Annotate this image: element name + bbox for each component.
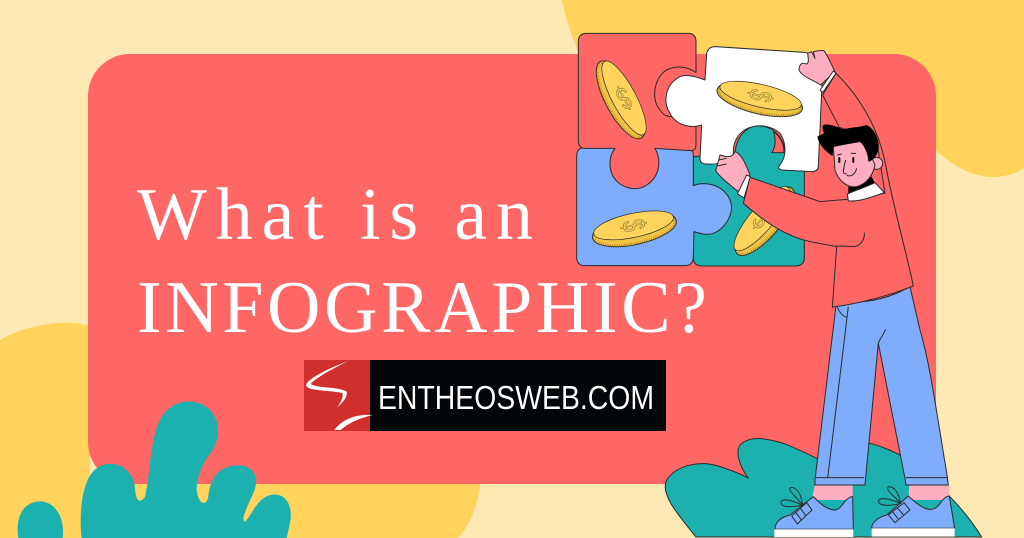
plant bottom left bbox=[18, 401, 291, 538]
coin on red piece: $ bbox=[611, 80, 637, 117]
sweater bbox=[743, 73, 913, 307]
logo bbox=[304, 360, 666, 431]
hair bbox=[817, 125, 879, 162]
logo text background bbox=[370, 360, 666, 431]
coin on red piece bbox=[587, 54, 655, 145]
title line 1: What is an bbox=[137, 174, 533, 256]
lower cuff bbox=[737, 175, 750, 198]
red puzzle piece bbox=[578, 33, 696, 189]
face bbox=[833, 142, 875, 187]
coin on teal piece bbox=[725, 178, 804, 264]
title bbox=[137, 174, 707, 349]
collar bbox=[847, 183, 884, 201]
lower hand finger lines bbox=[717, 158, 727, 166]
coin on teal piece: $ bbox=[746, 201, 778, 236]
right shoe bbox=[872, 496, 955, 528]
neck bbox=[848, 177, 875, 195]
logo mark background bbox=[304, 360, 371, 431]
logo wordmark: ENTHEOSWEB.COM bbox=[378, 379, 654, 416]
ear bbox=[871, 157, 883, 169]
facial lines bbox=[837, 153, 857, 176]
logo mark strokes bbox=[306, 361, 373, 430]
white puzzle piece bbox=[666, 47, 823, 172]
jigsaw puzzle bbox=[577, 33, 823, 266]
raised cuff bbox=[820, 71, 836, 93]
left laces bbox=[781, 487, 812, 524]
right laces bbox=[878, 487, 910, 523]
figure: legs and shoes bbox=[774, 287, 955, 537]
notch showing coral bbox=[772, 132, 784, 153]
yellow blob top right bbox=[562, 0, 1024, 177]
left sole bbox=[774, 529, 853, 537]
raised hand bbox=[799, 51, 835, 85]
bush behind figure bbox=[665, 439, 982, 537]
title line 2: INFOGRAPHIC? bbox=[137, 267, 707, 349]
teal puzzle piece bbox=[693, 126, 804, 266]
trousers bbox=[815, 287, 948, 485]
eyes bbox=[839, 158, 853, 162]
panel: main coral card bbox=[88, 54, 936, 484]
figure: torso, arm and head bbox=[716, 51, 913, 307]
sleeve fold bbox=[837, 233, 864, 247]
lower hand bbox=[716, 152, 750, 192]
yellow blob bottom left bbox=[0, 323, 480, 538]
coin on white piece bbox=[714, 75, 806, 123]
trouser details bbox=[816, 307, 947, 478]
coin on white piece: $ bbox=[742, 86, 779, 105]
blue puzzle piece bbox=[577, 148, 731, 266]
right sole bbox=[872, 528, 955, 537]
socks bbox=[812, 484, 949, 500]
left shoe bbox=[775, 497, 853, 529]
coin on blue piece: $ bbox=[615, 216, 652, 235]
coin on blue piece bbox=[589, 205, 679, 253]
